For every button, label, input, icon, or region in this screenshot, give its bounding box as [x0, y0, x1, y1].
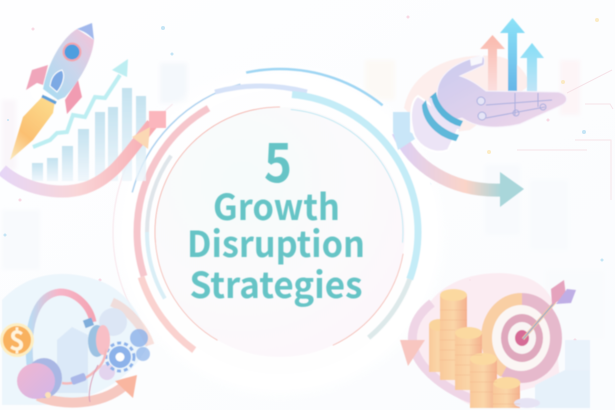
swoosh arrow left [400, 303, 475, 400]
icon: gears [99, 308, 150, 380]
swoosh arrow right [393, 112, 524, 207]
panel: rocket and growth chart [2, 23, 166, 191]
title: 5 [264, 119, 292, 198]
title [187, 119, 365, 309]
panel: coins and target [400, 273, 590, 408]
icon: robot hand [411, 55, 567, 152]
swoosh arrow bottom [38, 302, 150, 403]
icon: arrow in target [523, 280, 576, 339]
panel: central circle with rings [113, 65, 447, 399]
icon: headset [17, 292, 110, 402]
growth arrow line [33, 59, 128, 147]
icon: three up arrows [480, 18, 544, 95]
rings [113, 65, 447, 399]
icon: dollar coin [0, 319, 34, 358]
swoosh arrow [2, 111, 166, 191]
bar chart [32, 88, 146, 181]
icon: dollar coin: $ [9, 319, 25, 358]
title: Disruption [187, 216, 365, 268]
icon: coin stacks [429, 289, 540, 408]
icon: target [481, 293, 562, 383]
panel: headset, coin and gears [0, 274, 150, 405]
panel: robot hand and arrows [393, 18, 567, 207]
title: Strategies [190, 257, 362, 309]
title: Growth [213, 179, 340, 231]
building [57, 327, 88, 393]
icon: rocket [10, 23, 94, 160]
building [535, 365, 590, 408]
